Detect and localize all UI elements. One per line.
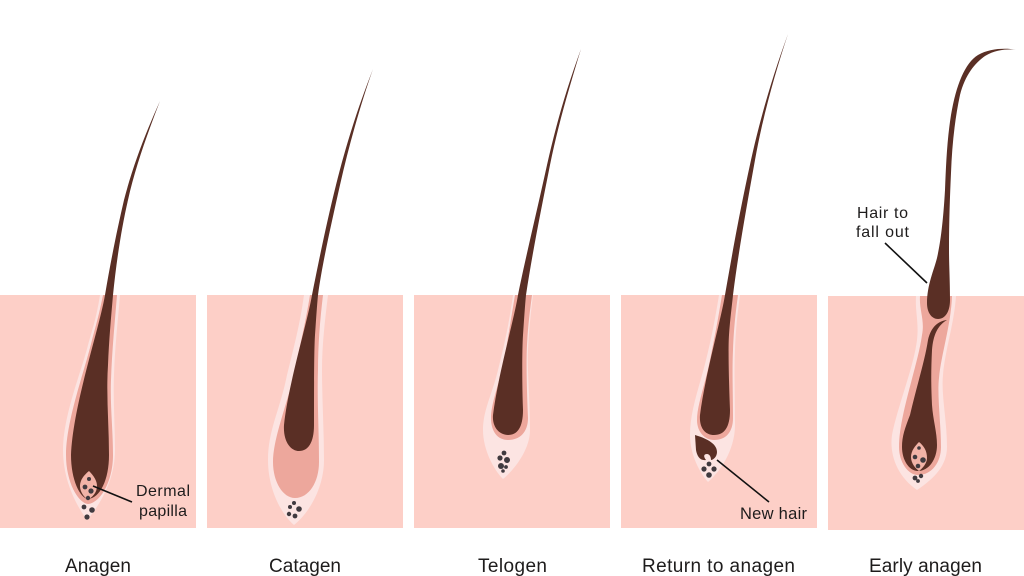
early anagen outer sheath <box>891 296 956 490</box>
panel: telogen <box>414 49 610 528</box>
early anagen dermal papilla <box>911 442 927 471</box>
label: hair to fall out <box>856 205 910 241</box>
catagen inner sheath <box>273 295 323 498</box>
anagen dermal papilla <box>80 471 97 500</box>
anagen inner sheath <box>66 295 117 504</box>
label: hair to fall out: Hair to <box>857 205 908 222</box>
new hair leader line <box>717 460 769 502</box>
anagen hair shaft <box>71 101 160 499</box>
label: dermal papilla: papilla <box>139 503 187 520</box>
return to anagen hair shaft <box>700 34 788 435</box>
new hair shaft <box>902 320 947 471</box>
early anagen papilla cells <box>913 446 926 468</box>
panel: catagen <box>207 69 403 528</box>
label: dermal papilla <box>136 483 190 520</box>
early anagen lower cells <box>913 474 923 483</box>
stage labels <box>65 556 982 576</box>
early anagen inner sheath <box>899 296 952 475</box>
label: new hair: New hair <box>740 505 808 523</box>
anagen outer sheath <box>63 295 120 520</box>
panel: anagen <box>0 101 196 528</box>
label: hair to fall out: fall out <box>856 224 910 241</box>
return to anagen cells <box>701 462 717 478</box>
telogen inner sheath <box>491 295 532 440</box>
catagen hair shaft <box>284 69 373 451</box>
return to anagen outer sheath <box>690 295 740 482</box>
panel: early anagen <box>828 49 1024 530</box>
catagen outer sheath <box>268 295 328 525</box>
telogen cells <box>497 451 510 473</box>
return to anagen inner sheath <box>697 295 738 440</box>
telogen hair shaft <box>493 49 581 435</box>
dermal papilla leader line <box>93 486 132 502</box>
anagen lower cells <box>82 505 95 520</box>
telogen outer sheath <box>483 295 533 479</box>
anagen papilla cells <box>83 477 94 500</box>
new hair bud <box>695 435 717 460</box>
falling hair shaft <box>927 49 1016 319</box>
panel: return to anagen <box>621 34 817 528</box>
catagen cells <box>287 501 302 518</box>
hair to fall out leader line <box>885 243 927 283</box>
label: dermal papilla: Dermal <box>136 483 190 500</box>
